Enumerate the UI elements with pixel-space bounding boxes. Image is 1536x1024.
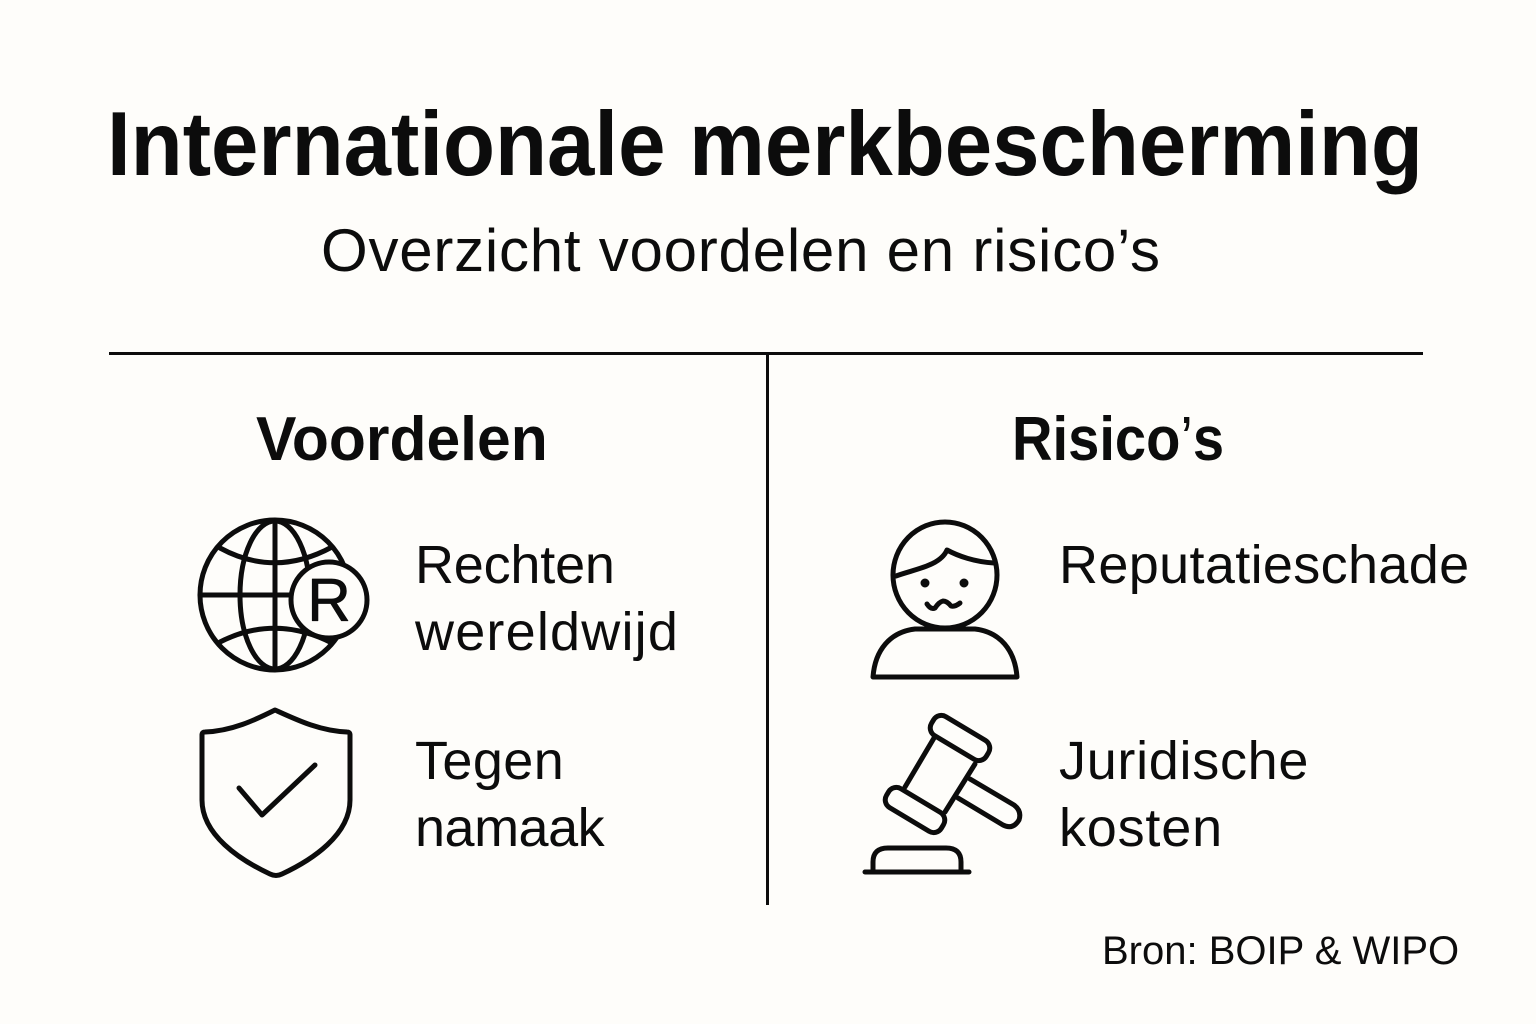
icon: worried person [870,520,1020,680]
panel: voordelen [198,405,679,878]
icon: globe with R [198,518,370,672]
text: rechten wereldwijd: Rechten [415,535,615,595]
title: Internationale merkbescherming [107,94,1423,195]
text: tegen namaak: Tegen [415,731,564,791]
icon: globe with R: R [307,567,351,634]
text: tegen namaak [415,731,605,858]
text: tegen namaak: namaak [415,798,604,858]
text: juridische kosten [1059,731,1309,858]
text: reputatieschade: Reputatieschade [1059,535,1470,595]
text: juridische kosten: kosten [1059,798,1223,858]
vertical divider [766,354,769,905]
subtitle: Overzicht voordelen en risico’s [321,217,1161,284]
text: rechten wereldwijd [414,535,679,662]
panel: risico's [862,405,1470,874]
icon: gavel [862,712,1022,874]
text: rechten wereldwijd: wereldwijd [415,602,679,662]
horizontal divider [109,352,1423,355]
source note: Bron: BOIP & WIPO [1102,929,1459,973]
heading: voordelen: Voordelen [256,405,548,474]
icon: shield with check [200,708,352,878]
heading: risico's: Risico’s [1012,405,1224,474]
text: juridische kosten: Juridische [1059,731,1309,791]
